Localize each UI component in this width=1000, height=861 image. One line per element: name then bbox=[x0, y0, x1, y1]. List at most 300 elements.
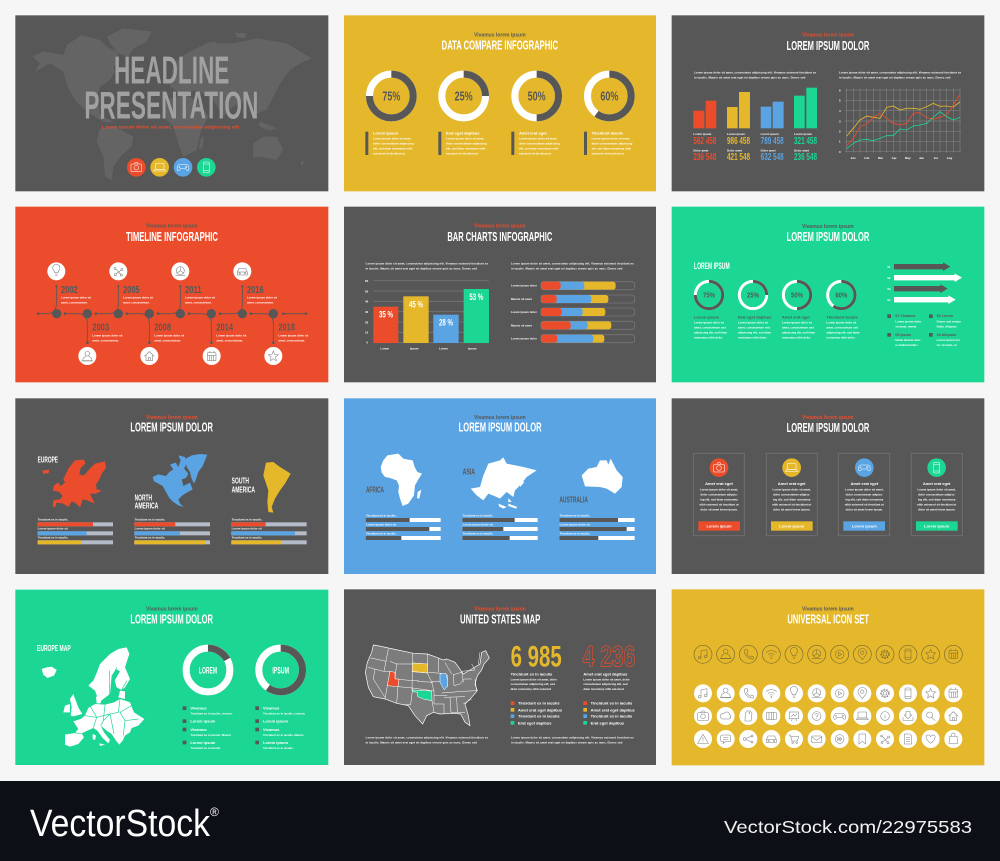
legend: Ipsum: Vivamus bbox=[263, 706, 280, 711]
bottom paragraph right bbox=[511, 735, 634, 744]
stat column green bbox=[794, 132, 817, 163]
text block 4: euismod sit tincidunt ut bbox=[592, 151, 624, 155]
text block 1 bbox=[365, 131, 414, 155]
bottom paragraph right: in iaculis. Mauris sit amet erat eget mi dapibus ornare quis ac nunc. Donec sed bbox=[511, 740, 623, 744]
stat text left: Tincidunt ex in iaculis bbox=[511, 671, 553, 676]
year 2018: 2018 bbox=[278, 323, 295, 334]
right paragraph: Lorem ipsum dolor sit amet, consectetur adipiscing elit. Vivamus euismod tincidunt ex bbox=[839, 70, 961, 74]
card: laptop: Lorem ipsum bbox=[779, 523, 805, 528]
column chart: 40 bbox=[365, 300, 369, 304]
donut 60%: 60% bbox=[600, 90, 618, 104]
year 2016: Lorem ipsum dolor sit bbox=[247, 296, 277, 300]
panel: continents two bbox=[344, 398, 656, 574]
column chart: 30 bbox=[365, 310, 369, 314]
card: camera bbox=[693, 453, 744, 536]
panel: green rings and arrows bbox=[672, 207, 984, 382]
stat column blue: Lorem ipsum bbox=[761, 132, 779, 136]
stat column green: 321 458 bbox=[794, 136, 817, 147]
arrow chart bbox=[887, 262, 962, 304]
progress bars: Asia: Tincidunt ex in iaculis. bbox=[463, 513, 493, 517]
title: LOREM IPSUM DOLOR bbox=[130, 420, 213, 435]
panel: United States map bbox=[344, 589, 656, 765]
title: DATA COMPARE INFOGRAPHIC bbox=[442, 37, 558, 52]
stat column red: Lorem ipsum bbox=[693, 132, 712, 136]
year 2003 bbox=[92, 323, 122, 342]
card: laptop: dolor sit amet lorem ipsum. bbox=[773, 507, 811, 511]
line chart: 0 bbox=[839, 150, 841, 154]
year 2008: 2008 bbox=[154, 323, 171, 334]
card: phone: ing elit, sed diam nonummy bbox=[918, 497, 956, 501]
legend: Ipsum: Tincidunt ex in iaculis, cnmsec bbox=[263, 712, 305, 716]
column chart: 28 % bbox=[439, 318, 453, 328]
stat column red: Dolor amet bbox=[693, 148, 708, 152]
map: Africa bbox=[381, 454, 422, 506]
column chart: Lorem bbox=[439, 346, 448, 350]
ring caption 1: adipiscing elit, sed diam bbox=[694, 330, 728, 334]
ring caption 2: Erat eget dapibus bbox=[738, 315, 772, 320]
label: Africa: AFRICA bbox=[366, 485, 384, 495]
progress bars: Africa: Tincidunt ex in iaculis. bbox=[366, 531, 397, 535]
card: gamepad: Lorem ipsum dolor sit amet, bbox=[845, 487, 884, 491]
text block 2: Lorem ipsum dolor sit amet, bbox=[446, 137, 484, 141]
stat column yellow bbox=[727, 132, 750, 163]
card: phone: Lorem ipsum dolor sit amet, bbox=[918, 487, 956, 491]
bottom paragraph left: Lorem ipsum dolor sit amet, consectetur adipiscing elit. Vivamus euismod tincidunt ex bbox=[366, 735, 488, 739]
legend right: Tincidunt ex in iaculis bbox=[591, 701, 633, 706]
headline: PRESENTATION bbox=[84, 84, 258, 127]
text block 2: elit, sed diam nonummy nibh bbox=[446, 146, 486, 150]
left paragraph: Lorem ipsum dolor sit amet, consectetur adipiscing elit. Vivamus euismod tincidunt ex bbox=[366, 261, 488, 265]
ring caption 1 bbox=[694, 315, 728, 339]
donut: Ipsum bbox=[259, 648, 302, 692]
left paragraph: in iaculis. Mauris sit amet erat eget mi dapibus ornare quis ac nunc. Donec sed bbox=[366, 266, 477, 270]
left paragraph bbox=[366, 261, 488, 270]
text block 1: elit, sed diam nonummy nibh bbox=[373, 146, 413, 150]
donut 25% bbox=[442, 74, 485, 118]
ring caption 3: amet, consectetuer sed bbox=[782, 325, 814, 329]
text block 3: Lorem ipsum dolor sit amet, bbox=[519, 137, 557, 141]
right paragraph: Lorem ipsum dolor sit amet, consectetur adipiscing elit. Vivamus euismod tincidunt ex bbox=[511, 261, 634, 265]
text block 3: elit, sed diam nonummy nibh bbox=[519, 146, 559, 150]
year 2003: amet, consectetuer. bbox=[92, 338, 119, 342]
year 2002: Lorem ipsum dolor sit bbox=[61, 296, 91, 300]
card: phone: Amet erat eget bbox=[923, 481, 951, 486]
arrow legend: in eleifend tellus bbox=[895, 343, 918, 347]
text block 1: dolor consectetuer adipiscing bbox=[373, 142, 414, 146]
year 2005: Lorem ipsum dolor sit bbox=[123, 296, 153, 300]
progress bars: South America: Tincidunt ex in iaculis. bbox=[232, 536, 262, 540]
text block 4: Lorem ipsum dolor sit amet, bbox=[592, 137, 630, 141]
progress bars: Europe bbox=[38, 518, 113, 544]
donut 50% bbox=[515, 74, 558, 118]
year 2014 bbox=[216, 323, 246, 342]
panel: universal icon set bbox=[672, 589, 984, 765]
line chart: Jun bbox=[919, 156, 924, 160]
ring caption 2 bbox=[738, 315, 772, 339]
stat column green: 236 548 bbox=[794, 152, 817, 163]
year 2018 bbox=[278, 323, 308, 342]
arrow chart: 04 bbox=[887, 298, 891, 302]
text block 4 bbox=[584, 131, 633, 155]
arrow legend: 01 Vivamus bbox=[895, 314, 915, 318]
card: camera: dolor consectetuer adipisc- bbox=[700, 492, 738, 496]
card: phone bbox=[911, 453, 962, 536]
progress bars: Australia: Tincidunt ex in iaculis. bbox=[560, 513, 590, 517]
arrow legend: 03 Ipsum bbox=[895, 333, 912, 337]
arrow legend: 02 Lorem bbox=[937, 314, 954, 318]
progress bars: South America bbox=[231, 518, 307, 544]
subtitle: Vivamus lorem ipsum bbox=[146, 606, 198, 612]
column chart: 20 bbox=[365, 320, 369, 324]
stat column red: 236 548 bbox=[693, 152, 717, 163]
stacked bars bbox=[511, 282, 635, 343]
progress bars: South America: Tincidunt ex in iaculis. bbox=[232, 518, 262, 522]
label: South America bbox=[232, 476, 255, 495]
icon row bbox=[127, 158, 216, 177]
stat column green: Lorem ipsum bbox=[794, 132, 812, 136]
stat text right: Amet erat eget dapibus bbox=[583, 671, 628, 676]
arrow legend: 04 Aliquam bbox=[937, 333, 957, 337]
outlined icon row bbox=[694, 645, 962, 663]
year 2014: Lorem ipsum dolor sit bbox=[216, 333, 246, 337]
legend right: Amet erat eget dapibus bbox=[591, 707, 636, 712]
left paragraph: Lorem ipsum dolor sit amet, consectetur adipiscing elit. Vivamus euismod tincidunt ex bbox=[694, 70, 816, 74]
title: LOREM IPSUM DOLOR bbox=[787, 420, 870, 435]
donut: Ipsum: IPSUM bbox=[272, 665, 289, 675]
headline: HEADLINE bbox=[114, 48, 229, 92]
footer logo: VectorStock bbox=[30, 803, 211, 845]
stacked bars: Lorem ipsum dolor bbox=[511, 284, 538, 288]
stat text right: consectetuer adipiscing elit, sed bbox=[583, 682, 628, 686]
timeline connectors bbox=[37, 285, 307, 344]
bottom paragraph right: Lorem ipsum dolor sit amet, consectetur adipiscing elit. Vivamus euismod tincidunt ex bbox=[511, 735, 634, 739]
panel: timeline infographic bbox=[15, 207, 328, 382]
ring caption 4: nonummy nibh dolor. bbox=[826, 335, 856, 339]
title: LOREM IPSUM DOLOR bbox=[787, 38, 870, 53]
ring caption 4: amet, consectetuer sed bbox=[826, 325, 858, 329]
line chart: 5 bbox=[839, 99, 841, 103]
label: North America: NORTH bbox=[135, 492, 152, 502]
year 2008 bbox=[154, 323, 184, 342]
column chart: 45 % bbox=[409, 299, 423, 309]
legend right bbox=[583, 701, 636, 725]
title: LOREM IPSUM DOLOR bbox=[787, 229, 870, 244]
subtitle: Vivamus lorem ipsum bbox=[146, 224, 198, 230]
line chart: May bbox=[905, 156, 911, 160]
progress bars: South America: Lorem ipsum dolor sit bbox=[232, 527, 262, 531]
line chart: Mar bbox=[878, 156, 884, 160]
legend: Lorem: Vivamus bbox=[190, 706, 207, 711]
label: South America: AMERICA bbox=[232, 485, 255, 495]
ring caption 4: Lorem ipsum dolor sit bbox=[826, 320, 856, 324]
label: Australia: AUSTRALIA bbox=[559, 494, 588, 504]
donut 25%: 25% bbox=[455, 90, 473, 104]
ring caption 2: amet, consectetuer sed bbox=[738, 325, 770, 329]
year 2002: 2002 bbox=[61, 285, 78, 296]
ring caption 3: nonummy nibh dolor. bbox=[782, 335, 811, 339]
ring 60%: 60% bbox=[835, 291, 847, 300]
card: phone: dolor sit amet lorem ipsum. bbox=[918, 507, 956, 511]
card: laptop: nibh euismod sit tincidunt ut bbox=[772, 502, 811, 506]
line chart: Jan bbox=[851, 156, 856, 160]
ring 25%: 25% bbox=[747, 291, 759, 300]
left paragraph: in iaculis. Mauris sit amet erat eget mi dapibus ornare quis ac nunc. Donec sed bbox=[694, 75, 806, 79]
subtitle: Vivamus lorem ipsum bbox=[474, 224, 526, 230]
arrow legend: Nulla. Aliquam bbox=[937, 324, 957, 328]
card: camera: dolor sit amet lorem ipsum. bbox=[700, 507, 738, 511]
stat column blue: Dolor amet bbox=[761, 148, 776, 152]
year 2002: amet, consectetuer. bbox=[61, 301, 88, 305]
arrow legend bbox=[887, 314, 961, 347]
year 2014: 2014 bbox=[216, 323, 233, 334]
panel: headline presentation bbox=[15, 15, 328, 191]
legend: Lorem: Tincidunt ex in iaculis. Mauris bbox=[190, 733, 231, 737]
legend: Lorem: Vivamus bbox=[190, 727, 207, 732]
panel: continents one bbox=[15, 398, 328, 574]
ring 50%: 50% bbox=[791, 291, 803, 300]
legend: Ipsum bbox=[255, 706, 305, 750]
label: North America: AMERICA bbox=[135, 501, 159, 511]
stacked bars: Lorem ipsum dolor bbox=[511, 310, 538, 314]
legend: Ipsum: Lorem ipsum bbox=[263, 719, 288, 724]
text block 4: Tincidunt iaculis bbox=[592, 131, 624, 136]
progress bars: Africa: Lorem ipsum dolor sit bbox=[366, 522, 396, 526]
timeline nodes bbox=[52, 309, 278, 318]
progress bars: North America: Lorem ipsum dolor sit bbox=[135, 527, 165, 531]
progress bars: North America: Tincidunt ex in iaculis. bbox=[135, 536, 165, 540]
card: phone: nibh euismod sit tincidunt ut bbox=[917, 502, 956, 506]
card: laptop bbox=[766, 453, 817, 536]
arrow legend: Etiam dictum ante, bbox=[895, 338, 921, 342]
column chart: Lorem bbox=[380, 346, 390, 350]
card: camera: Amet erat eget bbox=[705, 481, 734, 486]
stacked bars: Lorem ipsum dolor bbox=[511, 337, 538, 341]
stat column yellow: Dolor amet bbox=[727, 148, 742, 152]
text block 1: Lorem ipsum dolor sit amet, bbox=[373, 137, 411, 141]
card: gamepad: ing elit, sed diam nonummy bbox=[846, 497, 884, 501]
map: Europe bbox=[42, 460, 106, 508]
progress bars: Asia: Tincidunt ex in iaculis. bbox=[463, 531, 493, 535]
card: camera: Lorem ipsum bbox=[706, 523, 732, 528]
year 2011: Lorem ipsum dolor sit bbox=[185, 296, 215, 300]
left paragraph bbox=[694, 70, 816, 79]
column chart bbox=[365, 279, 489, 350]
stat column blue bbox=[761, 132, 784, 163]
text block 1: Lorem ipsum bbox=[373, 131, 398, 136]
panel: data compare infographic bbox=[344, 15, 656, 191]
text block 3: Amet erat eget bbox=[519, 131, 547, 136]
right paragraph: in iaculis. Mauris sit amet erat eget mi dapibus ornare quis ac nunc. Donec sed bbox=[511, 266, 623, 270]
ring caption 4 bbox=[826, 315, 860, 339]
title: TIMELINE INFOGRAPHIC bbox=[126, 229, 218, 244]
card: gamepad: Lorem ipsum bbox=[852, 523, 877, 528]
line chart: 3 bbox=[839, 119, 841, 123]
card: camera: Lorem ipsum dolor sit amet, bbox=[700, 487, 738, 491]
map: North America bbox=[153, 454, 207, 507]
progress bars: North America: Tincidunt ex in iaculis. bbox=[135, 518, 165, 522]
map: United States bbox=[365, 645, 489, 726]
column chart: 10 bbox=[365, 331, 369, 335]
year 2011: amet, consectetuer. bbox=[185, 301, 212, 305]
ring caption 3: adipiscing elit, sed diam bbox=[782, 330, 816, 334]
column chart: 35 % bbox=[379, 310, 393, 320]
text block 3 bbox=[511, 131, 560, 155]
stat text left: diam nonummy nibh euismod bbox=[511, 687, 551, 691]
card: laptop: Amet erat eget bbox=[778, 481, 806, 486]
ring caption 1: Lorem ipsum dolor sit bbox=[694, 320, 724, 324]
year 2016 bbox=[247, 285, 277, 305]
stat column red: 562 458 bbox=[693, 136, 717, 147]
stat column blue: 789 458 bbox=[761, 136, 784, 147]
legend: Lorem: Lorem ipsum bbox=[190, 719, 216, 724]
year 2018: Lorem ipsum dolor sit bbox=[278, 333, 308, 337]
stat column red bbox=[693, 132, 717, 163]
world map bbox=[32, 28, 312, 180]
year 2016: 2016 bbox=[247, 285, 264, 296]
ring caption 4: adipiscing elit, sed diam bbox=[826, 330, 860, 334]
bottom paragraph left bbox=[366, 735, 488, 744]
year 2011: 2011 bbox=[185, 285, 202, 296]
legend: Lorem: Tincidunt ex in iaculis. bbox=[190, 746, 221, 750]
stat text left: Lorem ipsum dolor sit amet, dolor bbox=[511, 677, 558, 681]
stat column yellow: 986 458 bbox=[727, 136, 750, 147]
panel: bar and line charts bbox=[672, 15, 984, 191]
card: phone: Lorem ipsum bbox=[924, 523, 950, 528]
stat: 6 985: 6 985 bbox=[511, 641, 562, 674]
text block 4: dolor consectetuer adipiscing bbox=[592, 142, 633, 146]
right paragraph bbox=[839, 70, 961, 79]
registered mark: ® bbox=[210, 805, 219, 819]
year 2005: amet, consectetuer. bbox=[123, 301, 150, 305]
ring 75% bbox=[695, 281, 723, 309]
ring caption 2: Lorem ipsum dolor sit bbox=[738, 320, 768, 324]
panel: Europe map bbox=[15, 590, 328, 765]
card: gamepad: nibh euismod sit tincidunt ut bbox=[845, 502, 884, 506]
line chart: 4 bbox=[839, 109, 841, 113]
year 2003: 2003 bbox=[92, 323, 109, 334]
subtitle: Vivamus lorem ipsum bbox=[474, 606, 526, 612]
text block 4: elit, sed diam nonummy nibh bbox=[592, 146, 631, 150]
card: phone: dolor consectetuer adipisc- bbox=[918, 492, 955, 496]
stat column blue: 632 548 bbox=[761, 152, 784, 163]
ring caption 4: Tincidunt iaculis bbox=[826, 315, 858, 320]
progress bars: Africa bbox=[366, 513, 441, 540]
legend left: Amet erat eget dapibus bbox=[518, 707, 563, 712]
year 2005 bbox=[123, 285, 153, 305]
ring caption 1: nonummy nibh dolor. bbox=[694, 335, 723, 339]
timeline icons bbox=[47, 262, 282, 365]
title: LOREM IPSUM DOLOR bbox=[459, 420, 542, 435]
subtitle: Vivamus lorem ipsum bbox=[802, 415, 854, 421]
stat: 4 236: 4 236 bbox=[583, 641, 635, 674]
white icon row 3 bbox=[694, 730, 962, 748]
legend: Ipsum: Tincidunt ex in iaculis. Mauris bbox=[263, 733, 304, 737]
stat text left: consectetuer adipiscing elit, sed bbox=[511, 682, 555, 686]
panel: feature cards bbox=[672, 398, 984, 574]
progress bars: Australia: Lorem ipsum dolor sit bbox=[560, 522, 590, 526]
legend left: Erat eget dapibus bbox=[518, 720, 552, 725]
progress bars: Australia: Tincidunt ex in iaculis. bbox=[560, 531, 590, 535]
ring 75%: 75% bbox=[703, 291, 715, 300]
stat column green: Dolor amet bbox=[794, 148, 809, 152]
stacked bars: Mauris sit amet bbox=[511, 323, 532, 327]
arrow legend: Donec sed ornare bbox=[937, 320, 961, 324]
legend: Ipsum: Lorem ipsum bbox=[263, 740, 288, 745]
year 2008: Lorem ipsum dolor sit bbox=[154, 333, 184, 337]
column chart: 60 bbox=[365, 279, 369, 283]
ring caption 3 bbox=[782, 315, 816, 339]
stat column yellow: 421 548 bbox=[727, 152, 750, 163]
legend: Lorem bbox=[183, 706, 233, 750]
legend left bbox=[511, 701, 563, 725]
arrow legend: sit amet, rimeat bbox=[895, 324, 916, 328]
subtitle: Vivamus lorem ipsum bbox=[474, 32, 526, 38]
progress bars: Asia bbox=[462, 513, 538, 540]
tagline: Lorem ipsum dolor sit amet, consectetur adipiscing elit. bbox=[102, 124, 241, 130]
stat text left bbox=[511, 671, 558, 691]
legend: Ipsum: Tincidunt ex in iaculis. bbox=[263, 746, 294, 750]
stat column yellow: Lorem ipsum bbox=[727, 132, 745, 136]
progress bars: Europe: Lorem ipsum dolor sit bbox=[38, 527, 68, 531]
year 2016: amet, consectetuer. bbox=[247, 301, 274, 305]
card: gamepad bbox=[838, 453, 890, 536]
ring caption 2: nonummy nibh dolor. bbox=[738, 335, 767, 339]
legend: Lorem: Tincidunt ex in iaculis, cnmsec bbox=[190, 712, 233, 716]
column chart: 0 bbox=[366, 341, 368, 345]
subtitle: Vivamus lorem ipsum bbox=[474, 415, 526, 421]
line chart: Apr bbox=[892, 156, 897, 160]
year 2011 bbox=[185, 285, 215, 305]
line chart: Feb bbox=[864, 156, 870, 160]
text block 1: euismod sit tincidunt ut bbox=[373, 151, 405, 155]
label: Europe: EUROPE bbox=[38, 454, 58, 464]
ring 25% bbox=[739, 281, 767, 309]
line chart: 6 bbox=[839, 88, 841, 92]
ring caption 1: amet, consectetuer sed bbox=[694, 325, 726, 329]
progress bars: Europe: Tincidunt ex in iaculis. bbox=[38, 536, 68, 540]
legend right: Tincidunt ex in iaculis bbox=[591, 714, 633, 719]
right paragraph bbox=[511, 261, 634, 270]
donut: Lorem bbox=[186, 648, 230, 692]
donut 60% bbox=[587, 74, 631, 118]
arrow legend: Lorem ipsum dolor bbox=[895, 320, 922, 324]
progress bars: Australia bbox=[559, 513, 635, 540]
arrow chart: 03 bbox=[887, 287, 891, 291]
legend: Lorem: Lorem ipsum bbox=[190, 740, 216, 745]
headline bbox=[84, 48, 258, 127]
legend left: Tincidunt ex in iaculis bbox=[518, 714, 560, 719]
subtitle: Vivamus lorem ipsum bbox=[802, 606, 854, 612]
legend left: Tincidunt ex in iaculis bbox=[518, 701, 560, 706]
progress bars: Africa: Tincidunt ex in iaculis. bbox=[366, 513, 397, 517]
card: laptop: ing elit, sed diam nonummy bbox=[773, 497, 811, 501]
label: Asia: ASIA bbox=[463, 467, 475, 477]
subtitle: Vivamus lorem ipsum bbox=[146, 415, 198, 421]
white icon row 1 bbox=[694, 684, 962, 702]
column chart: Ipsum bbox=[410, 346, 419, 350]
white icon row 2 bbox=[694, 707, 962, 725]
text block 2: dolor consectetuer adipiscing bbox=[446, 142, 487, 146]
arrow legend: tor sit amet, cu bbox=[937, 343, 957, 347]
ring caption 1: Lorem ipsum bbox=[694, 315, 719, 320]
text block 2 bbox=[438, 131, 487, 155]
section heading: LOREM IPSUM bbox=[694, 261, 730, 271]
footer band bbox=[0, 781, 1000, 861]
map: Australia bbox=[582, 459, 623, 494]
right paragraph: in iaculis. Mauris sit amet erat eget mi dapibus ornare quis ac nunc. Donec sed bbox=[839, 75, 951, 79]
legend: Ipsum: Vivamus bbox=[263, 727, 280, 732]
map: Asia bbox=[471, 457, 537, 509]
